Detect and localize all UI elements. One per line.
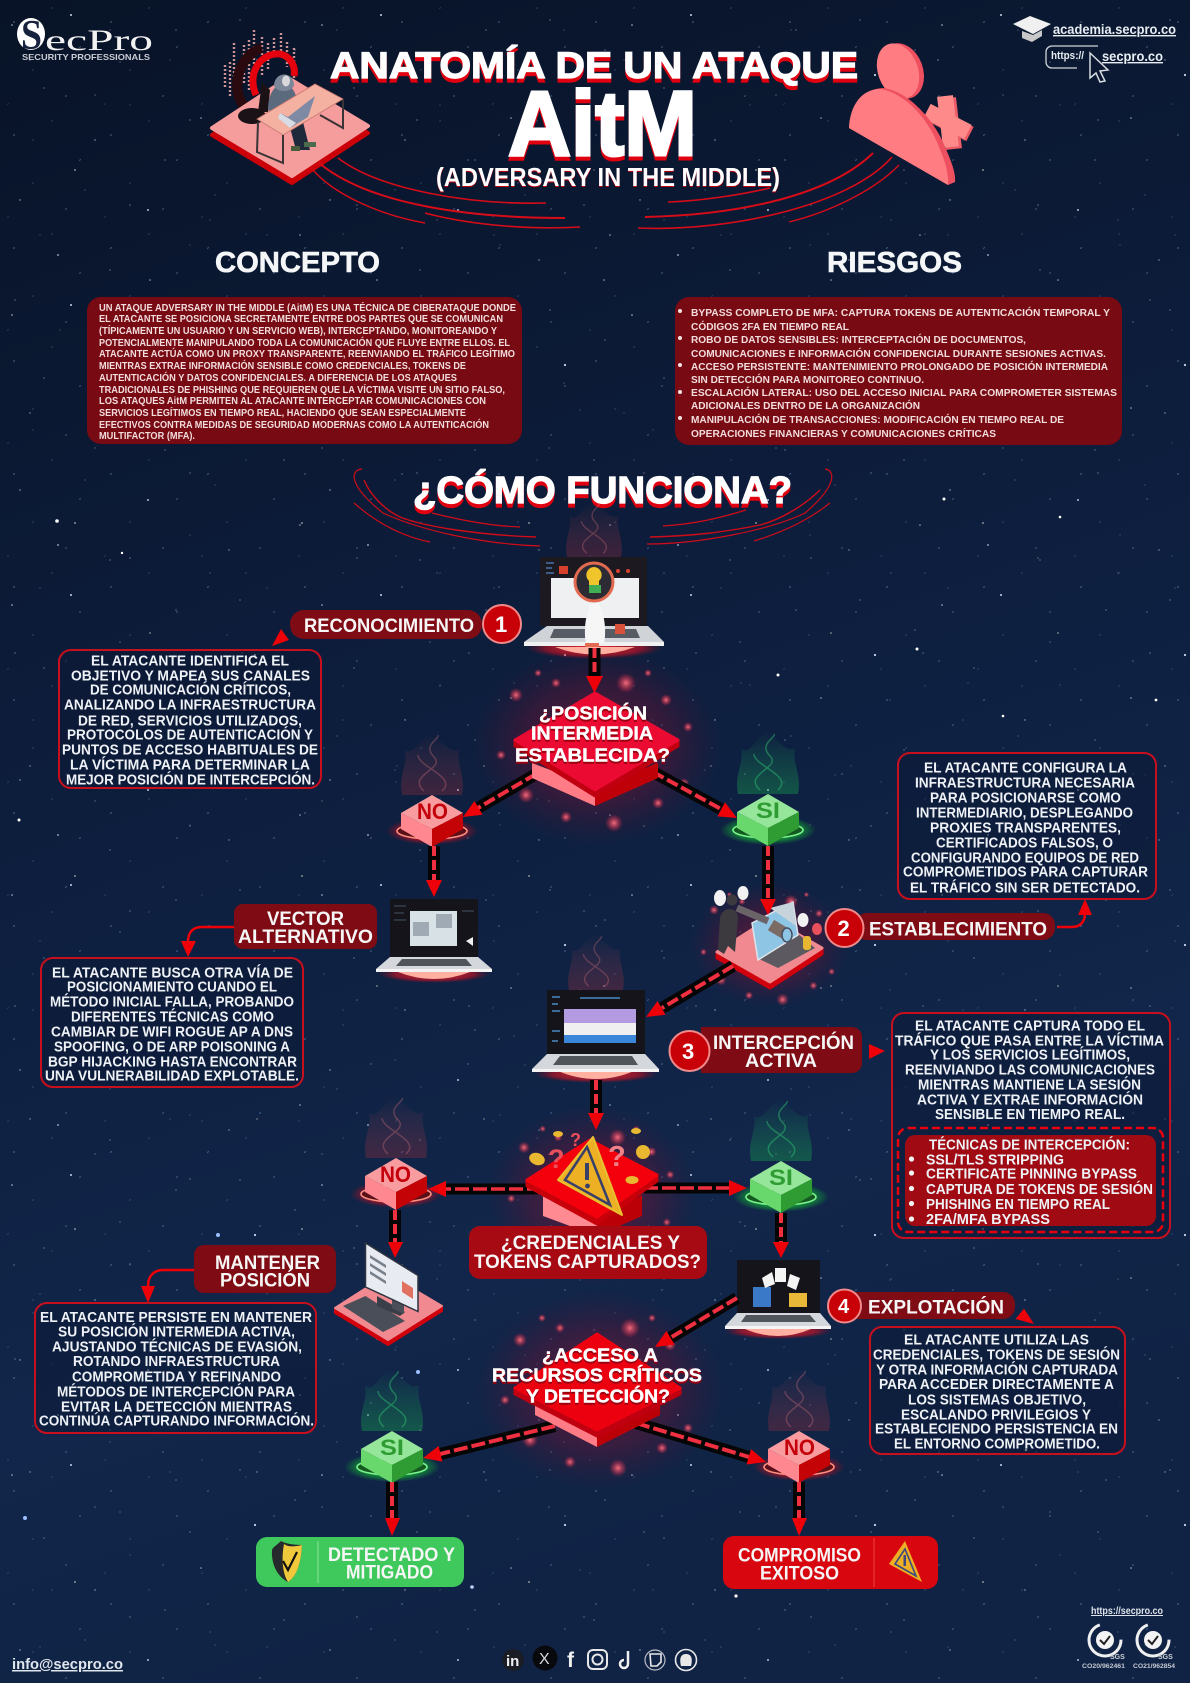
text box: intercepcion activa: EL ATACANTE CAPTURA TODO EL — [915, 1018, 1145, 1034]
footer: social icons — [502, 1646, 696, 1672]
label: vector alternativo: ALTERNATIVO — [238, 926, 373, 948]
panel: riesgos: OPERACIONES FINANCIERAS Y COMUNICACIONES CRÍTICAS — [691, 427, 996, 440]
label: reconocimiento: RECONOCIMIENTO — [304, 615, 474, 637]
top-right links: https:// — [1051, 50, 1084, 62]
text box: mantener posicion — [35, 1303, 316, 1433]
logo: SecPro: SECURITY PROFESSIONALS — [22, 52, 150, 62]
text box: establecimiento: EL ATACANTE CONFIGURA LA — [924, 760, 1127, 776]
badge: step 3 — [670, 1031, 710, 1071]
text box: explotacion: ESTABLECIENDO PERSISTENCIA EN — [875, 1422, 1118, 1438]
text box: reconocimiento: PROTOCOLOS DE AUTENTICACIÓN Y — [67, 726, 313, 744]
text box: explotacion: PARA ACCEDER DIRECTAMENTE A — [879, 1377, 1114, 1393]
title: (ADVERSARY IN THE MIDDLE) — [436, 162, 780, 192]
text box: reconocimiento: OBJETIVO Y MAPEA SUS CANALES — [71, 668, 310, 684]
arrow: reconocimiento to text — [272, 629, 289, 646]
panel: concepto: AUTENTICACIÓN Y DATOS CONFIDENCIALES. A DIFERENCIA DE LOS ATAQUES — [99, 371, 457, 384]
text box: establecimiento: INFRAESTRUCTURA NECESARIA — [915, 776, 1135, 792]
cube: si 3 — [344, 1369, 440, 1483]
text box: explotacion: ESCALANDO PRIVILEGIOS Y — [901, 1408, 1091, 1424]
text box: reconocimiento: MEJOR POSICIÓN DE INTERCEPCIÓN. — [66, 770, 315, 788]
footer: certification badges: CO20/962461 — [1082, 1663, 1125, 1670]
panel: tecnicas de intercepcion — [898, 1128, 1163, 1232]
text box: vector alternativo: UNA VULNERABILIDAD EXPLOTABLE. — [45, 1068, 299, 1084]
icon: vector alternativo laptop — [376, 899, 492, 983]
outcome: detectado y mitigado: DETECTADO Y — [328, 1544, 455, 1566]
panel: riesgos: ROBO DE DATOS SENSIBLES: INTERCEPTACIÓN DE DOCUMENTOS, — [691, 333, 1026, 346]
logo: SecPro: S — [21, 13, 42, 59]
panel: concepto: UN ATAQUE ADVERSARY IN THE MIDDLE (AitM) ES UNA TÉCNICA DE CIBERATAQUE DONDE — [99, 301, 516, 314]
footer: certification badges: SGS — [1110, 1654, 1125, 1661]
badge: step 1: 1 — [495, 612, 507, 637]
label: vector alternativo: VECTOR — [267, 908, 344, 930]
text box: explotacion: EL ATACANTE UTILIZA LAS — [904, 1332, 1089, 1348]
panel: riesgos: ACCESO PERSISTENTE: MANTENIMIENTO PROLONGADO DE POSICIÓN INTERMEDIA — [691, 360, 1108, 373]
text box: vector alternativo: MÉTODO INICIAL FALLA, PROBANDO — [50, 994, 294, 1010]
title: AitM — [508, 73, 697, 175]
decision: posicion intermedia: ¿POSICIÓN — [539, 702, 647, 724]
outcome: detectado y mitigado: MITIGADO — [346, 1562, 433, 1584]
label: credenciales y tokens capturados — [469, 1226, 707, 1279]
panel: concepto: TRADICIONALES DE PHISHING QUE REQUIEREN QUE LA VÍCTIMA VISITE UN SITIO FALSO, — [99, 383, 505, 396]
decision: posicion intermedia: ESTABLECIDA? — [515, 744, 670, 766]
panel: concepto: EFECTIVOS CONTRA MEDIDAS DE SEGURIDAD MODERNAS COMO LA AUTENTICACIÓN — [99, 418, 489, 431]
text: acceso a recursos criticos — [492, 1344, 702, 1406]
cube: si 1 — [720, 732, 816, 846]
panel: riesgos: SIN DETECCIÓN PARA MONITOREO CONTINUO. — [691, 373, 924, 386]
cube: si 2: SI — [769, 1165, 793, 1190]
text box: intercepcion activa: REENVIANDO LAS COMUNICACIONES — [905, 1062, 1155, 1078]
text box: vector alternativo: POSICIONAMIENTO CUANDO EL — [67, 980, 277, 996]
badge: step 4 — [828, 1290, 861, 1322]
text box: vector alternativo — [41, 958, 303, 1087]
footer: certification badges: https://secpro.co — [1091, 1606, 1163, 1617]
text box: explotacion: LOS SISTEMAS OBJETIVO, — [908, 1392, 1086, 1408]
panel: concepto: LOS ATAQUES AitM PERMITEN AL ATACANTE INTERCEPTAR COMUNICACIONES CON — [99, 395, 486, 407]
outcome: compromiso exitoso: COMPROMISO — [738, 1544, 861, 1566]
text box: establecimiento: COMPROMETIDOS PARA CAPTURAR — [903, 864, 1148, 880]
arrow: laptop 3 to credentials decision — [588, 1080, 604, 1130]
arrow: si 2 to laptop 4 — [773, 1213, 789, 1258]
arrow: explotacion to text — [1016, 1309, 1034, 1324]
cube: no 2 — [350, 1096, 442, 1210]
label: reconocimiento — [290, 610, 482, 639]
label: establecimiento: ESTABLECIMIENTO — [869, 918, 1047, 940]
label: intercepcion activa: ACTIVA — [745, 1050, 817, 1072]
footer: social icons: in — [506, 1653, 519, 1670]
cube: no 3 — [753, 1369, 845, 1483]
arrow: vector alternativo to text — [181, 927, 234, 957]
arrow: no to vector alternativo laptop — [426, 846, 442, 897]
text box: vector alternativo: CAMBIAR DE WIFI ROGUE AP A DNS — [51, 1024, 293, 1040]
top-right links — [1013, 16, 1176, 82]
arrow: mantener to text — [141, 1270, 194, 1303]
text box: reconocimiento: LA VÍCTIMA PARA DETERMINAR LA — [70, 756, 310, 774]
badge: step 3: 3 — [682, 1039, 694, 1064]
arrow: credentials to si — [644, 1180, 747, 1196]
arrow: si to establecimiento — [760, 846, 776, 915]
panel: concepto — [87, 297, 522, 444]
arrow: decision 1 to si — [653, 772, 737, 818]
text box: mantener posicion: ROTANDO INFRAESTRUCTURA — [73, 1354, 280, 1370]
text box: mantener posicion: SU POSICIÓN INTERMEDIA ACTIVA, — [58, 1322, 295, 1340]
panel: riesgos: ESCALACIÓN LATERAL: USO DEL ACCESO INICIAL PARA COMPROMETER SISTEMAS — [691, 386, 1117, 399]
footer: certification badges: CO21/962854 — [1133, 1663, 1175, 1670]
text box: vector alternativo: DIFERENTES TÉCNICAS COMO — [71, 1008, 274, 1026]
icon: step 4 laptop — [724, 1260, 832, 1339]
decorative arcs under title — [313, 153, 899, 228]
badge: step 2: 2 — [838, 916, 850, 941]
panel: tecnicas de intercepcion: TÉCNICAS DE INTERCEPCIÓN: — [929, 1136, 1130, 1154]
badge: step 1 — [483, 605, 521, 643]
text box: intercepcion activa: SENSIBLE EN TIEMPO REAL. — [935, 1107, 1125, 1123]
text box: mantener posicion: EL ATACANTE PERSISTE EN MANTENER — [40, 1310, 312, 1326]
label: intercepcion activa — [701, 1027, 862, 1073]
text: acceso a recursos criticos: RECURSOS CRÍTICOS — [492, 1364, 702, 1386]
panel: tecnicas de intercepcion: SSL/TLS STRIPPING — [926, 1152, 1064, 1168]
panel: riesgos: CÓDIGOS 2FA EN TIEMPO REAL — [691, 320, 850, 333]
footer: certification badges — [1082, 1606, 1175, 1670]
arrow: decision 1 to no — [463, 774, 536, 817]
label: explotacion: EXPLOTACIÓN — [868, 1294, 1004, 1318]
arrow: decision 3 to no — [636, 1423, 766, 1464]
panel: riesgos: BYPASS COMPLETO DE MFA: CAPTURA TOKENS DE AUTENTICACIÓN TEMPORAL Y — [691, 306, 1110, 319]
text box: reconocimiento: ANALIZANDO LA INFRAESTRUCTURA — [64, 698, 316, 714]
panel: concepto: MIENTRAS EXTRAE INFORMACIÓN SENSIBLE COMO CREDENCIALES, TOKENS DE — [99, 359, 466, 372]
panel: riesgos — [675, 297, 1122, 445]
panel: riesgos: MANIPULACIÓN DE TRANSACCIONES: MODIFICACIÓN EN TIEMPO REAL DE — [691, 413, 1064, 426]
panel: concepto: ATACANTE ACTÚA COMO UN PROXY TRANSPARENTE, REENVIANDO EL TRÁFICO LEGÍTIMO — [99, 347, 515, 360]
heading: como funciona with arcs — [354, 468, 832, 546]
illustration: user with plus sign — [849, 37, 970, 185]
red glows behind flowchart — [471, 645, 850, 1490]
cube: no 2: NO — [380, 1162, 411, 1187]
panel: riesgos: ADICIONALES DENTRO DE LA ORGANIZACIÓN — [691, 399, 920, 412]
arrow: establecimiento to text — [1057, 899, 1092, 927]
footer: social icons: X — [539, 1651, 550, 1668]
decision: credenciales warning icon: ? — [608, 1141, 626, 1173]
arrow: decision 3 to si — [423, 1426, 555, 1462]
badge: step 4: 4 — [838, 1296, 850, 1318]
panel: concepto: SERVICIOS LEGÍTIMOS EN TIEMPO REAL, HACIENDO QUE SEAN ESPECIALMENTE — [99, 406, 466, 419]
panel: concepto: EL ATACANTE SE POSICIONA SECRETAMENTE ENTRE DOS PARTES QUE SE COMUNICAN — [99, 313, 503, 325]
text box: intercepcion activa — [892, 1013, 1170, 1238]
text box: vector alternativo: EL ATACANTE BUSCA OTRA VÍA DE — [52, 964, 293, 982]
text box: vector alternativo: BGP HIJACKING HASTA ENCONTRAR — [48, 1054, 297, 1070]
panel: concepto: (TÍPICAMENTE UN USUARIO Y UN SERVICIO WEB), INTERCEPTANDO, MONITOREANDO Y — [99, 324, 497, 337]
label: mantener posicion: MANTENER — [215, 1252, 320, 1274]
text box: mantener posicion: COMPROMETIDA Y REFINANDO — [72, 1370, 281, 1386]
text box: mantener posicion: MÉTODOS DE INTERCEPCIÓN PARA — [57, 1382, 295, 1400]
text box: mantener posicion: AJUSTANDO TÉCNICAS DE EVASIÓN, — [52, 1338, 302, 1356]
label: mantener posicion: POSICIÓN — [220, 1268, 310, 1292]
text box: intercepcion activa: TRÁFICO QUE PASA ENTRE LA VÍCTIMA — [895, 1032, 1164, 1050]
text box: establecimiento: PROXIES TRANSPARENTES, — [930, 820, 1121, 836]
text box: explotacion — [870, 1327, 1125, 1454]
panel: concepto: MULTIFACTOR (MFA). — [99, 430, 195, 442]
decision: acceso a recursos criticos — [515, 1334, 680, 1447]
label: credenciales y tokens capturados: TOKENS CAPTURADOS? — [474, 1251, 701, 1273]
text box: establecimiento: CERTIFICADOS FALSOS, O — [936, 836, 1113, 852]
text box: reconocimiento: DE COMUNICACIÓN CRÍTICOS, — [90, 680, 291, 698]
text box: explotacion: Y OTRA INFORMACIÓN CAPTURADA — [876, 1360, 1118, 1378]
panel: tecnicas de intercepcion: CAPTURA DE TOKENS DE SESIÓN — [926, 1180, 1153, 1198]
text box: establecimiento: EL TRÁFICO SIN SER DETECTADO. — [910, 880, 1140, 896]
text box: vector alternativo: SPOOFING, O DE ARP POISONING A — [54, 1040, 290, 1056]
decision: posicion intermedia — [515, 693, 678, 806]
label: credenciales y tokens capturados: ¿CREDENCIALES Y — [501, 1232, 680, 1254]
icon: mantener posicion computer — [335, 1243, 442, 1345]
label: intercepcion activa: INTERCEPCIÓN — [713, 1030, 854, 1054]
text box: establecimiento: CONFIGURANDO EQUIPOS DE RED — [911, 850, 1139, 866]
heading: como funciona with arcs: ¿CÓMO FUNCIONA? — [413, 468, 792, 512]
panel: concepto: POTENCIALMENTE MANIPULANDO TODA LA COMUNICACIÓN QUE FLUYE ENTRE ELLOS. EL — [99, 336, 511, 349]
footer: social icons: f — [567, 1649, 575, 1672]
text box: intercepcion activa: ACTIVA Y EXTRAE INFORMACIÓN — [917, 1090, 1143, 1108]
text box: explotacion: CREDENCIALES, TOKENS DE SESIÓN — [873, 1346, 1120, 1364]
cube: no 1 — [386, 733, 478, 847]
arrow: diagonal into decision 3 — [655, 1298, 737, 1347]
arrow: laptop to decision 1 — [586, 648, 603, 693]
text box: intercepcion activa: MIENTRAS MANTIENE LA SESIÓN — [918, 1076, 1141, 1094]
panel: tecnicas de intercepcion: CERTIFICATE PINNING BYPASS — [926, 1166, 1137, 1182]
footer: certification badges: SGS — [1158, 1654, 1173, 1661]
arrow: si 3 to detectado — [385, 1482, 400, 1536]
text box: establecimiento: INTERMEDIARIO, DESPLEGANDO — [916, 806, 1133, 822]
arrow: no 3 to compromiso — [792, 1482, 807, 1536]
text: acceso a recursos criticos: Y DETECCIÓN? — [526, 1386, 670, 1406]
top-right links: secpro.co — [1102, 48, 1163, 64]
text box: intercepcion activa: Y LOS SERVICIOS LEGÍTIMOS, — [930, 1046, 1130, 1064]
icon: step 1 laptop — [524, 501, 664, 659]
panel: tecnicas de intercepcion: PHISHING EN TIEMPO REAL — [926, 1197, 1110, 1213]
cube: si 2 — [733, 1099, 829, 1213]
footer: email: info@secpro.co — [12, 1656, 123, 1673]
cube: no 3: NO — [784, 1435, 815, 1460]
decision: credenciales warning icon: ? — [548, 1144, 564, 1174]
title — [330, 45, 858, 192]
text box: reconocimiento: DE RED, SERVICIOS UTILIZADOS, — [78, 714, 302, 730]
logo: SecPro: ecPro — [45, 24, 153, 57]
outcome: compromiso exitoso: EXITOSO — [760, 1562, 839, 1584]
text box: establecimiento: PARA POSICIONARSE COMO — [930, 790, 1121, 806]
badge: step 2 — [826, 909, 864, 947]
text box: reconocimiento — [59, 650, 321, 788]
arrow: credentials to no — [428, 1181, 541, 1197]
outcome: compromiso exitoso — [723, 1536, 938, 1589]
top-right links: academia.secpro.co — [1053, 21, 1176, 37]
heading: concepto: CONCEPTO — [215, 247, 380, 279]
arrow: establecimiento to interception laptop — [646, 966, 733, 1017]
illustration: hacker at desk — [212, 30, 368, 183]
cube: si 3: SI — [380, 1435, 404, 1460]
label: mantener posicion — [194, 1245, 336, 1293]
decision: credenciales warning icon: ? — [570, 1130, 581, 1150]
text box: mantener posicion: CONTINÚA CAPTURANDO INFORMACIÓN. — [39, 1412, 314, 1430]
title: ANATOMÍA DE UN ATAQUE — [330, 45, 858, 86]
text box: reconocimiento: PUNTOS DE ACCESO HABITUALES DE — [62, 742, 318, 758]
text box: establecimiento — [898, 753, 1156, 899]
logo: SecPro — [17, 13, 153, 62]
text box: explotacion: EL ENTORNO COMPROMETIDO. — [894, 1436, 1100, 1452]
heading: riesgos: RIESGOS — [827, 247, 962, 279]
arrow: no 2 to computer — [388, 1210, 403, 1258]
decision: posicion intermedia: INTERMEDIA — [531, 722, 653, 744]
arrow: intercepcion to text — [869, 1044, 885, 1059]
label: vector alternativo — [234, 904, 377, 949]
cube: si 1: SI — [756, 798, 780, 823]
icon: step 3 laptop — [532, 934, 659, 1083]
decision: credenciales warning icon — [527, 1128, 657, 1236]
icon: step 2 interception scene — [714, 886, 822, 988]
panel: riesgos: COMUNICACIONES E INFORMACIÓN CONFIDENCIAL DURANTE SESIONES ACTIVAS. — [691, 347, 1106, 360]
outcome: detectado y mitigado — [256, 1537, 464, 1587]
panel: tecnicas de intercepcion: 2FA/MFA BYPASS — [926, 1212, 1050, 1228]
cube: no 1: NO — [417, 799, 448, 824]
text box: mantener posicion: EVITAR LA DETECCIÓN MIENTRAS — [61, 1398, 292, 1416]
text: acceso a recursos criticos: ¿ACCESO A — [542, 1344, 658, 1366]
text box: reconocimiento: EL ATACANTE IDENTIFICA EL — [91, 654, 289, 670]
